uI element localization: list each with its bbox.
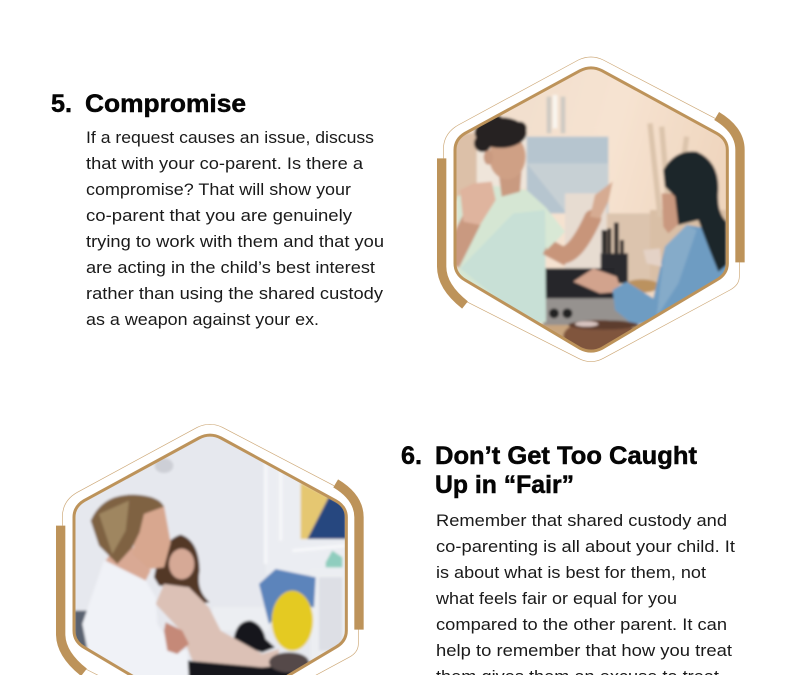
text block: fair body [435, 512, 735, 675]
man [456, 186, 547, 324]
photo: couple seated on sofa, hexagon frame [61, 424, 359, 675]
text block: compromise body: If a request causes an issue, discuss [86, 129, 374, 147]
text block: fair body: what feels fair or equal for you [435, 590, 677, 608]
text block: compromise body: are acting in the child’s best interest [86, 259, 375, 277]
text block: compromise body: as a weapon against your ex. [86, 311, 319, 329]
text block: compromise body: compromise? That will show your [86, 181, 352, 199]
text block: compromise body: that with your co-parent. Is there a [86, 155, 364, 173]
heading: 5. Compromise: Compromise [85, 90, 246, 118]
heading: 6. Don't Get Too Caught Up in Fair: Up in “Fair” [435, 471, 574, 499]
text block: compromise body: co-parent that you are genuinely [86, 207, 353, 225]
hexagon frame [61, 424, 359, 675]
text block: compromise body [86, 129, 384, 329]
woman [573, 268, 622, 293]
text block: compromise body: trying to work with them and that you [86, 233, 384, 251]
text block: compromise body: rather than using the shared custody [86, 285, 384, 303]
text block: fair body: help to remember that how you treat [436, 642, 732, 660]
photo: couple arguing in kitchen, hexagon frame [442, 57, 740, 362]
text block: fair body: is about what is best for them, not [436, 564, 706, 582]
text block: fair body: co-parenting is all about your child. It [436, 538, 735, 556]
heading: 6. Don't Get Too Caught Up in Fair: Don’t Get Too Caught [435, 442, 698, 470]
heading: 6. Don't Get Too Caught Up in Fair [401, 442, 698, 499]
heading: 6. Don't Get Too Caught Up in Fair: 6. [401, 442, 422, 470]
text block: fair body: compared to the other parent. It can [436, 616, 727, 634]
section 5: compromise [51, 57, 740, 362]
section 6: don't get too caught up in fair [61, 424, 735, 675]
text block: fair body: Remember that shared custody and [436, 512, 727, 530]
heading: 5. Compromise: 5. [51, 90, 72, 118]
hexagon frame [442, 57, 740, 362]
